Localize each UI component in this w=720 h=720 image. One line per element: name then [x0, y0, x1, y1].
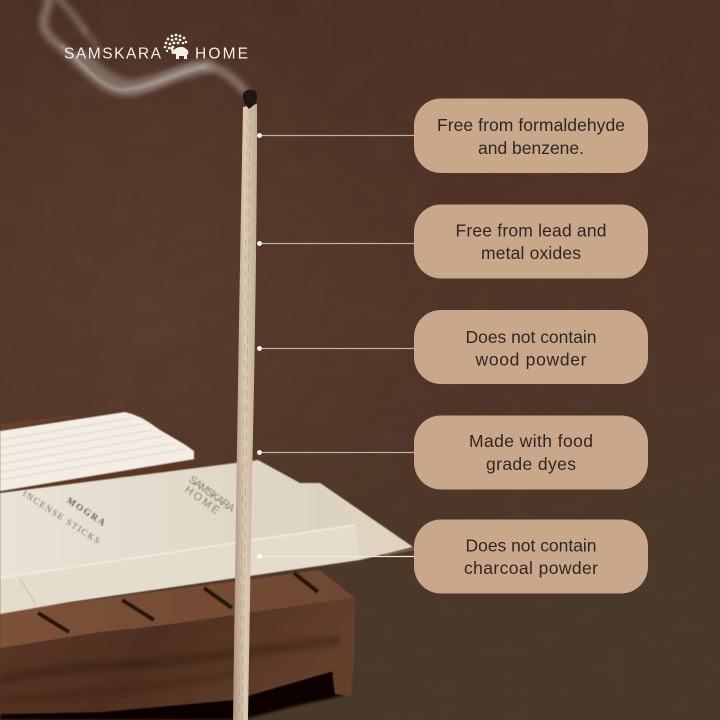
box front face — [0, 525, 360, 614]
pill — [414, 416, 648, 490]
pill — [414, 98, 648, 173]
box label: brand second line: HOME — [182, 484, 222, 517]
tray leg — [332, 662, 354, 696]
pill text: grade dyes — [486, 454, 576, 474]
white incense sticks bundle — [0, 410, 195, 499]
tray shadow — [0, 668, 345, 720]
pill text: charcoal powder — [464, 558, 598, 578]
connector dot — [257, 554, 262, 559]
callout 4 — [257, 416, 648, 490]
smoke — [44, 0, 244, 92]
box top face — [0, 460, 413, 578]
icon: tree and elephant — [164, 34, 188, 59]
pill text — [469, 431, 593, 474]
pill — [414, 520, 648, 594]
pill text: metal oxides — [481, 243, 581, 263]
connector line — [259, 556, 415, 558]
pill text — [464, 536, 598, 578]
pill — [414, 204, 648, 278]
pill text: wood powder — [474, 350, 587, 370]
connector line — [259, 134, 415, 136]
pill — [414, 310, 648, 384]
connector line — [259, 452, 415, 454]
wooden tray — [0, 570, 355, 720]
pill text: and benzene. — [478, 138, 584, 158]
logo — [64, 34, 248, 62]
callout 2 — [257, 204, 648, 278]
connector dot — [257, 241, 262, 246]
connector dot — [257, 346, 262, 351]
logo wordmark right: HOME — [195, 46, 248, 62]
pill text: Free from lead and — [456, 220, 606, 240]
tray slats — [38, 573, 318, 632]
callout 5 — [257, 520, 648, 594]
incense box — [0, 460, 414, 614]
box label: description: INCENSE STICKS — [21, 488, 102, 546]
pill text — [437, 115, 625, 158]
box label: brand: SAMSKARA — [186, 474, 238, 516]
pill text — [466, 327, 596, 370]
burning incense stick — [233, 90, 257, 720]
logo wordmark left: SAMSKARA — [64, 46, 162, 62]
connector line — [259, 348, 415, 350]
pill text: Free from formaldehyde — [437, 115, 625, 135]
callout 1 — [257, 98, 648, 173]
pill text: Made with food — [469, 431, 593, 451]
icon: ash tip — [243, 90, 257, 109]
connector dot — [257, 450, 262, 455]
pill text — [456, 220, 606, 263]
box label: product name: MOGRA — [64, 496, 107, 529]
box flap — [320, 483, 413, 560]
connector dot — [257, 133, 262, 138]
connector line — [259, 242, 415, 244]
callout 3 — [257, 310, 648, 384]
pill text: Does not contain — [466, 327, 596, 347]
pill text: Does not contain — [466, 536, 596, 556]
